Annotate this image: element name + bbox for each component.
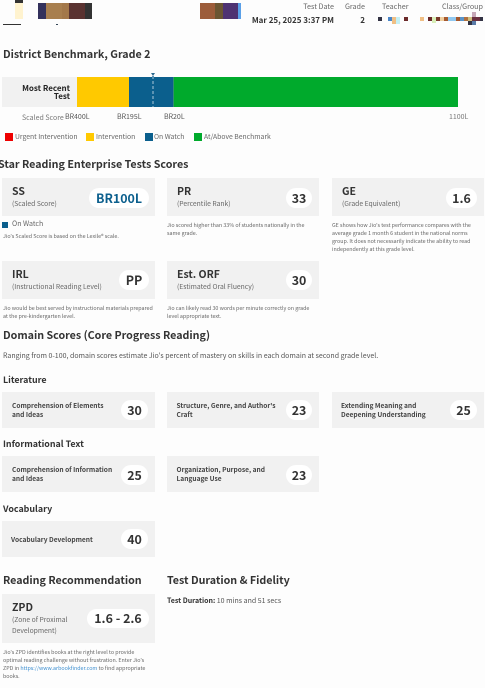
subheading: informational text: Informational Text <box>3 437 84 450</box>
on watch status: On Watch <box>12 219 43 229</box>
card: structure genre craft: Craft <box>176 409 193 419</box>
note: percentile rank: same grade. <box>167 229 197 237</box>
note: grade equivalent: independently at this grade level. <box>332 245 415 253</box>
card: instructional reading level <box>2 261 155 299</box>
header: test date <box>252 2 334 26</box>
card: scaled score: SS <box>12 184 25 199</box>
domain scores description: Ranging from 0-100, domain scores estimate Jio's percent of mastery on skills in each domain at second grade level. <box>3 351 378 361</box>
note: estimated oral fluency <box>167 304 310 320</box>
card: vocabulary development: 40 <box>127 530 142 548</box>
heading: test duration: Test Duration & Fidelity <box>167 573 290 588</box>
note: zpd <box>3 648 146 680</box>
benchmark bar chart <box>2 73 458 107</box>
card: instructional reading level: PP <box>126 271 142 289</box>
card: organization purpose: 23 <box>292 466 306 484</box>
card: estimated oral fluency: Est. ORF <box>177 267 220 282</box>
note: instructional reading level: Jio would be best served by instructional materials prepared <box>3 304 153 312</box>
header: grade: Grade <box>345 2 365 12</box>
score marker <box>151 73 155 107</box>
card: zone of proximal development: ZPD <box>12 600 33 615</box>
row label: most recent test <box>2 77 77 107</box>
card: comprehension of information: Comprehension of Information <box>12 464 112 474</box>
note: percentile rank <box>167 221 304 237</box>
card: comprehension of elements <box>2 392 155 428</box>
header: test date: Test Date <box>303 2 334 12</box>
card: structure genre craft: 23 <box>292 401 306 419</box>
scale labels: 1100L <box>449 112 468 122</box>
note: scaled score: Jio's Scaled Score is based on the Lexile® scale. <box>3 232 119 240</box>
scale labels: BR400L <box>65 112 90 122</box>
card: vocabulary development <box>2 521 155 557</box>
card: scaled score: BR100L <box>96 189 142 207</box>
row label: most recent test: Most Recent <box>22 83 70 94</box>
card: comprehension of elements: 30 <box>127 401 142 419</box>
segment: at or above benchmark <box>173 77 458 107</box>
card: scaled score: (Scaled Score) <box>12 198 57 208</box>
header: class group <box>420 2 483 25</box>
header: teacher: Teacher <box>382 2 408 12</box>
note: instructional reading level <box>3 304 153 320</box>
heading: domain scores: Domain Scores (Core Progress Reading) <box>3 328 210 343</box>
card: comprehension of information: 25 <box>127 466 142 484</box>
card: estimated oral fluency <box>167 261 319 299</box>
note: zpd: Jio's ZPD identifies books at the right level to provide <box>3 648 134 656</box>
card: organization purpose: Language Use <box>176 473 222 483</box>
subheading: vocabulary: Vocabulary <box>3 502 52 515</box>
card: zone of proximal development <box>2 594 155 643</box>
note: estimated oral fluency: level appropriate text. <box>167 312 221 320</box>
card: organization purpose <box>167 456 319 492</box>
legend: Urgent Intervention <box>15 131 78 141</box>
card: instructional reading level: IRL <box>12 267 29 282</box>
card: organization purpose: Organization, Purpose, and <box>176 464 265 474</box>
card: zone of proximal development: 1.6 - 2.6 <box>94 609 142 627</box>
header: redacted student name blocks <box>3 0 241 25</box>
card: structure genre craft: Structure, Genre, and Author's <box>176 400 275 410</box>
scale labels: BR195L <box>117 112 142 122</box>
note: estimated oral fluency: Jio can likely read 30 words per minute correctly on grade <box>167 304 309 312</box>
test duration value: Test Duration: 10 mins and 51 secs <box>167 596 281 606</box>
card: percentile rank: 33 <box>292 189 306 207</box>
card: extending meaning: Extending Meaning and <box>341 400 416 410</box>
legend: At/Above Benchmark <box>204 131 271 141</box>
note: grade equivalent: GE shows how Jio's test performance compares with the <box>332 221 471 229</box>
legend: On Watch <box>154 131 184 141</box>
card: grade equivalent <box>332 178 484 216</box>
legend: Intervention <box>96 131 135 141</box>
card: zone of proximal development: Development) <box>12 624 57 634</box>
scale labels <box>22 112 468 123</box>
card: estimated oral fluency: 30 <box>292 271 306 289</box>
card: extending meaning: 25 <box>456 401 471 419</box>
card: extending meaning <box>332 392 484 428</box>
heading: star reading scores: Star Reading Enterprise Tests Scores <box>0 157 188 172</box>
note: zpd: books. <box>3 672 20 680</box>
card: grade equivalent: GE <box>342 184 356 199</box>
note: zpd: ZPD in https://www.arbookfinder.com to find appropriate <box>3 664 145 672</box>
row label: most recent test: Test <box>54 91 70 102</box>
note: instructional reading level: at the pre-kindergarten level. <box>3 312 75 320</box>
scale labels: BR20L <box>164 112 185 122</box>
note: percentile rank: Jio scored higher than 33% of students nationally in the <box>167 221 304 229</box>
note: grade equivalent: average grade 1 month 6 student in the national norms <box>332 229 468 237</box>
card: grade equivalent: (Grade Equivalent) <box>342 198 400 208</box>
note: grade equivalent <box>332 221 471 253</box>
legend <box>5 131 271 141</box>
segment: on watch <box>129 77 173 107</box>
header: test date: Mar 25, 2025 3:37 PM <box>252 15 334 26</box>
card: extending meaning: Deepening Understanding <box>341 409 426 419</box>
subheading: literature: Literature <box>3 373 47 386</box>
scale labels: Scaled Score <box>22 113 64 123</box>
card: zone of proximal development: (Zone of Proximal <box>12 614 67 624</box>
card: instructional reading level: (Instructional Reading Level) <box>12 280 102 290</box>
card: grade equivalent: 1.6 <box>452 189 471 207</box>
card: comprehension of elements: Comprehension of Elements <box>12 400 103 410</box>
header: grade: 2 <box>360 15 365 26</box>
header: teacher <box>378 2 408 24</box>
note: grade equivalent: group. It does not necessarily indicate the ability to read <box>332 237 470 245</box>
card: vocabulary development: Vocabulary Development <box>11 534 93 544</box>
card: comprehension of information: and Ideas <box>12 473 43 483</box>
card: comprehension of information <box>2 456 155 492</box>
segment: intervention <box>77 77 129 107</box>
card: percentile rank: (Percentile Rank) <box>177 198 231 208</box>
card: structure genre craft <box>167 392 319 428</box>
heading: reading recommendation: Reading Recommendation <box>3 573 142 588</box>
header: grade <box>345 2 365 26</box>
card: percentile rank: PR <box>177 184 191 199</box>
card: comprehension of elements: and Ideas <box>12 409 43 419</box>
note: zpd: optimal reading challenge without frustration. Enter Jio's <box>3 656 144 664</box>
card: scaled score <box>2 178 155 216</box>
card: percentile rank <box>167 178 319 216</box>
card: estimated oral fluency: (Estimated Oral Fluency) <box>177 280 254 290</box>
header: class group: Class/Group <box>442 2 483 12</box>
heading: district benchmark: District Benchmark, Grade 2 <box>3 47 150 62</box>
